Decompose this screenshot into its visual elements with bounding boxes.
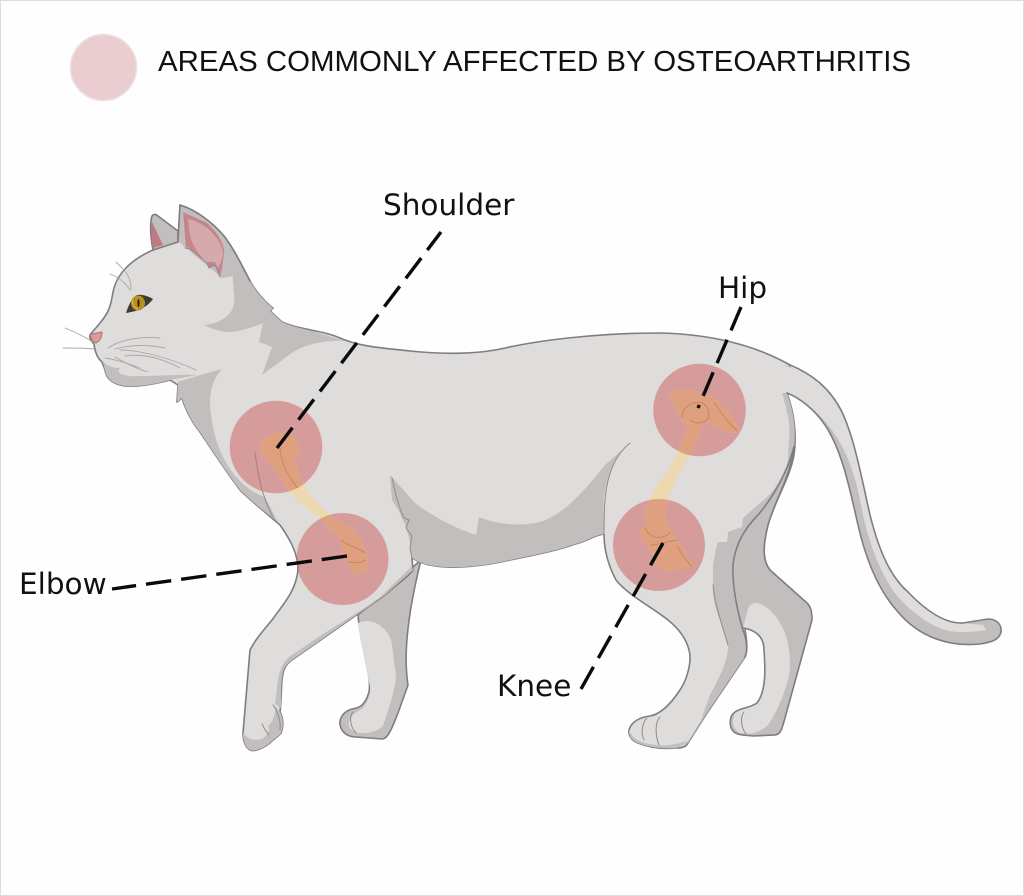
label: Hip: Hip [718, 271, 767, 305]
label: Knee: Knee [497, 669, 571, 703]
far ear [151, 214, 178, 250]
neck shading [204, 236, 345, 375]
joint circle: knee [613, 499, 705, 591]
label: Shoulder [277, 188, 515, 448]
joint circle: hip [653, 364, 746, 456]
joint circle: shoulder [230, 401, 322, 493]
far hind leg [730, 447, 812, 736]
bone: femur and pelvis [640, 390, 740, 570]
front paw shading [243, 706, 283, 751]
label: Elbow: Elbow [19, 567, 107, 601]
body detail lines [392, 478, 412, 558]
near ear [178, 205, 233, 278]
bone: humerus and forearm [261, 433, 368, 573]
belly shading [390, 443, 630, 567]
cat body and near legs [63, 205, 795, 751]
face: whiskers and brow [63, 262, 196, 372]
thigh and rear shading [677, 393, 795, 748]
joint circle: elbow [296, 513, 388, 605]
legend swatch [70, 34, 136, 100]
near hind paw shading [629, 730, 688, 748]
label: Hip [698, 271, 767, 408]
far front leg [340, 560, 421, 739]
label: Knee [497, 543, 663, 703]
face: nose [90, 332, 102, 343]
legend title: AREAS COMMONLY AFFECTED BY OSTEOARTHRITIS [158, 46, 911, 78]
label: Shoulder: Shoulder [383, 188, 515, 222]
tail [772, 358, 1001, 645]
chest shading [177, 369, 278, 522]
jaw shading [103, 362, 197, 386]
face: eye [126, 295, 153, 313]
label: Elbow [19, 556, 347, 601]
cat illustration [19, 188, 1001, 751]
front leg shading [275, 566, 413, 708]
